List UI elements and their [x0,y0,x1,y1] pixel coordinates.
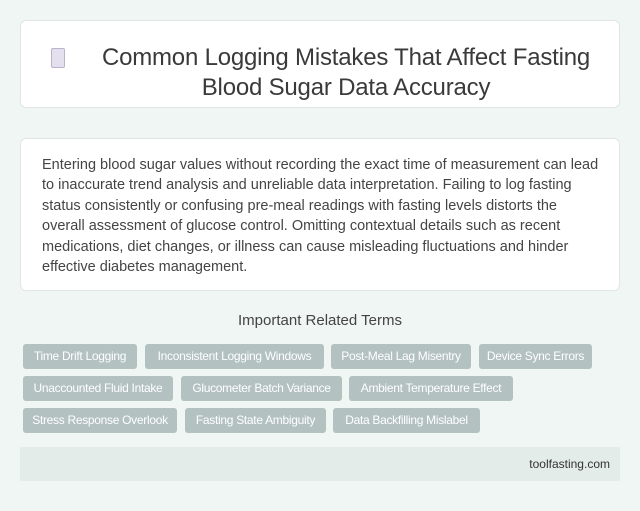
tags: Time Drift Logging [34,349,126,363]
text block: Entering blood sugar values without recording the exact time of measurement can lead [42,157,598,173]
footer: toolfasting.com [529,457,610,471]
footer [20,447,620,481]
tags: Inconsistent Logging Windows [158,349,311,363]
tags: Data Backfilling Mislabel [345,413,468,427]
text block [20,138,620,291]
tags: Device Sync Errors [487,349,584,363]
title: Common Logging Mistakes That Affect Fasting Blood Sugar Data Accuracy [102,44,590,101]
text block: to inaccurate trend analysis and unreliable data interpretation. Failing to log fasting [42,177,572,193]
title card [20,20,620,108]
tags: Stress Response Overlook [32,413,168,427]
text block: overall assessment of glucose control. Omitting contextual details such as recent [42,218,560,234]
tags: Unaccounted Fluid Intake [34,381,162,395]
tags: Fasting State Ambiguity [196,413,315,427]
icon: document [51,48,65,68]
text block: effective diabetes management. [42,259,247,275]
tags: Ambient Temperature Effect [361,381,501,395]
heading: related terms: Important Related Terms [238,312,402,329]
text block: medications, diet changes, or illness can cause misleading fluctuations and hinder [42,239,568,255]
tags: Post-Meal Lag Misentry [341,349,461,363]
text block: status consistently or confusing pre-meal readings with fasting levels distorts the [42,198,557,214]
tags: Glucometer Batch Variance [192,381,331,395]
